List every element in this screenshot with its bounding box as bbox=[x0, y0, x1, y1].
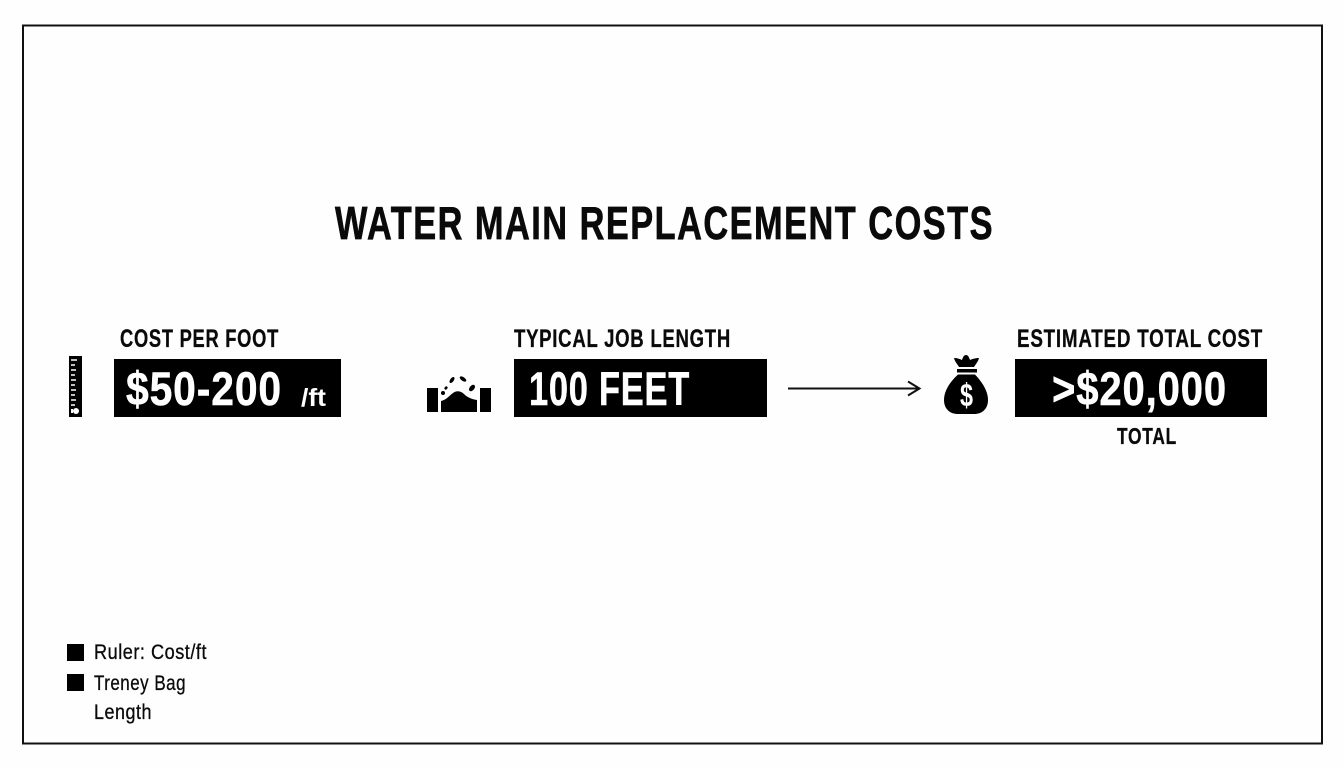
heading: cost per foot: COST PER FOOT bbox=[120, 325, 279, 353]
heading: estimated total cost: ESTIMATED TOTAL COST bbox=[1017, 325, 1263, 353]
value box: typical job length: 100 FEET bbox=[529, 362, 690, 415]
icon: ruler bbox=[69, 356, 82, 417]
value box: cost per foot: /ft bbox=[301, 384, 327, 412]
legend item: bag: Treney Bag bbox=[94, 672, 186, 695]
panel: estimated total cost bbox=[944, 325, 1267, 449]
icon: water main break bbox=[427, 375, 491, 412]
heading: typical job length: TYPICAL JOB LENGTH bbox=[514, 325, 731, 353]
arrow bbox=[788, 382, 920, 396]
value box: cost per foot: $50-200 bbox=[126, 362, 282, 415]
title: WATER MAIN REPLACEMENT COSTS bbox=[335, 197, 994, 249]
value box: estimated total cost: >$20,000 bbox=[1052, 362, 1227, 415]
caption: total: TOTAL bbox=[1117, 423, 1177, 449]
panel: cost per foot bbox=[69, 325, 341, 417]
icon: money bag bbox=[944, 355, 988, 414]
icon: money bag: $ bbox=[960, 377, 973, 413]
legend bbox=[67, 641, 207, 724]
panel: typical job length bbox=[427, 325, 767, 417]
legend item: ruler: Ruler: Cost/ft bbox=[94, 641, 207, 664]
legend item: bag bbox=[67, 672, 186, 724]
legend item: bag: Length bbox=[94, 701, 152, 724]
